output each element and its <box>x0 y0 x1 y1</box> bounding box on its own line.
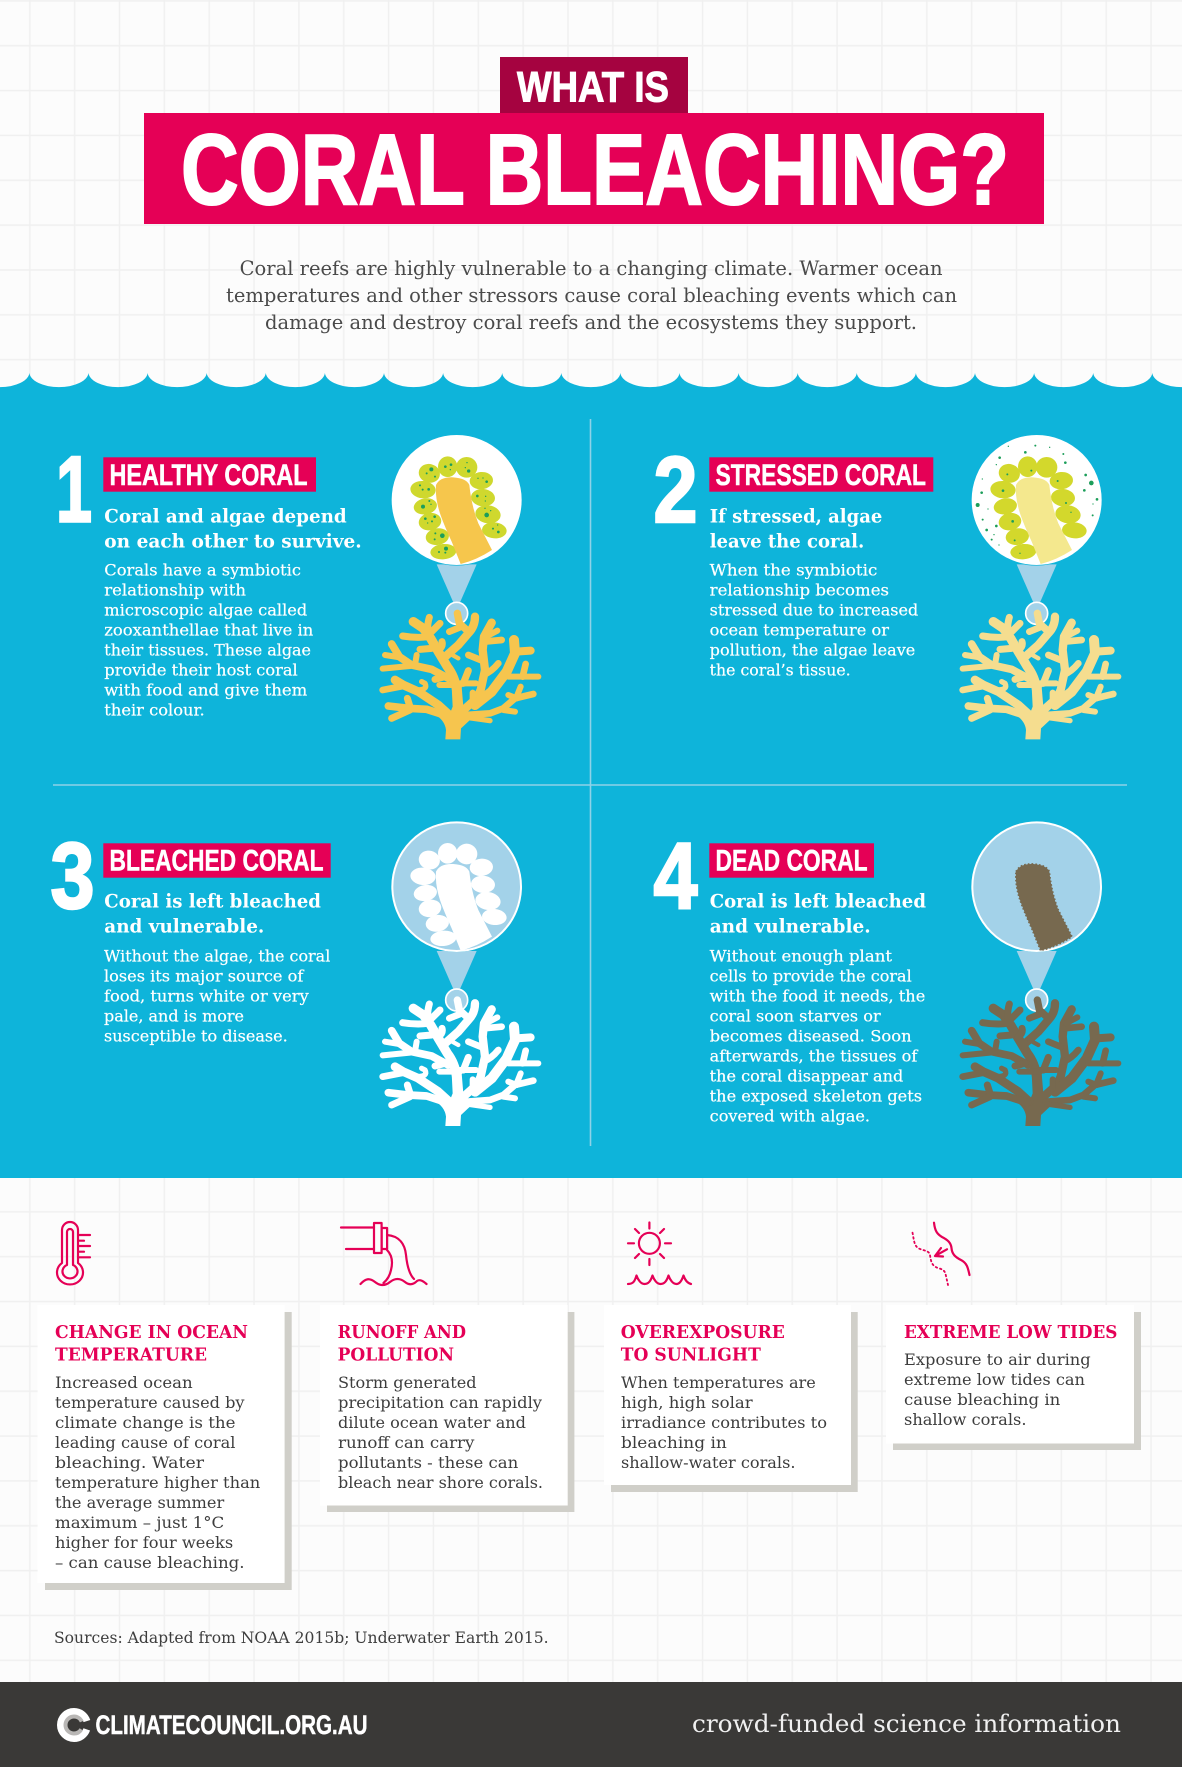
subheading <box>104 506 362 553</box>
label: healthy coral: HEALTHY CORAL <box>110 459 308 492</box>
body text: pollution, the algae leave <box>710 642 915 660</box>
card: overexposure to sunlight: bleaching in <box>621 1434 727 1452</box>
card: change in ocean temperature: higher for four weeks <box>55 1534 233 1552</box>
card: runoff and pollution: Storm generated <box>338 1374 477 1392</box>
number 3: 3 <box>50 823 94 928</box>
body text: their colour. <box>104 702 205 720</box>
subheading: Coral is left bleached <box>710 891 926 913</box>
body text: coral soon starves or <box>710 1007 881 1025</box>
body text: with the food it needs, the <box>710 987 925 1005</box>
card: change in ocean temperature: TEMPERATURE <box>55 1345 207 1366</box>
body text: the coral disappear and <box>710 1067 903 1085</box>
body text: relationship becomes <box>710 582 889 600</box>
card: runoff and pollution: POLLUTION <box>338 1345 454 1366</box>
subheading: and vulnerable. <box>104 916 264 938</box>
card: change in ocean temperature: the average summer <box>55 1494 225 1512</box>
logo mark <box>60 1712 88 1738</box>
body text: loses its major source of <box>104 967 305 985</box>
title <box>144 57 1044 226</box>
icon: thermometer <box>57 1222 90 1284</box>
card: change in ocean temperature: CHANGE IN OCEAN <box>55 1322 248 1343</box>
subheading: Coral and algae depend <box>104 506 347 528</box>
subheading <box>710 891 926 938</box>
card: change in ocean temperature: maximum – just 1°C <box>55 1514 224 1532</box>
intro text: temperatures and other stressors cause coral bleaching events which can <box>226 283 957 307</box>
body text: pale, and is more <box>104 1007 244 1025</box>
body text: cells to provide the coral <box>710 967 912 985</box>
subheading: If stressed, algae <box>710 506 882 528</box>
illustration: bleached coral <box>383 821 538 1126</box>
subheading: leave the coral. <box>710 531 864 553</box>
website: CLIMATECOUNCIL.ORG.AU <box>96 1710 368 1740</box>
body text: relationship with <box>104 582 246 600</box>
card: change in ocean temperature: temperature caused by <box>55 1394 245 1412</box>
card: runoff and pollution: RUNOFF AND <box>338 1322 466 1343</box>
body text: zooxanthellae that live in <box>104 622 313 640</box>
icon: tide line moving <box>912 1223 970 1285</box>
body text <box>104 947 330 1045</box>
panel 4: dead coral <box>654 821 1118 1126</box>
number 1: 1 <box>56 436 92 542</box>
illustration: stressed coral with algae leaving <box>963 435 1118 739</box>
card: change in ocean temperature: climate change is the <box>55 1414 236 1432</box>
label: stressed coral: STRESSED CORAL <box>716 459 926 492</box>
body text: with food and give them <box>104 682 308 700</box>
card: change in ocean temperature <box>38 1305 292 1590</box>
body text: the exposed skeleton gets <box>710 1087 922 1105</box>
ocean panel with scalloped top <box>0 373 1182 1178</box>
card: extreme low tides: extreme low tides can <box>904 1371 1085 1389</box>
card: runoff and pollution: dilute ocean water and <box>338 1414 526 1432</box>
card: overexposure to sunlight <box>604 1305 858 1492</box>
panel 2: stressed coral <box>654 435 1118 739</box>
label: dead coral: DEAD CORAL <box>716 845 868 878</box>
body text: provide their host coral <box>104 662 298 680</box>
illustration: dead coral <box>963 821 1118 1126</box>
tagline: crowd-funded science information <box>692 1710 1121 1738</box>
card: overexposure to sunlight: shallow-water corals. <box>621 1454 796 1472</box>
subheading: Coral is left bleached <box>104 891 321 913</box>
card: overexposure to sunlight: irradiance contributes to <box>621 1414 827 1432</box>
intro text: damage and destroy coral reefs and the ecosystems they support. <box>265 310 917 334</box>
body text: susceptible to disease. <box>104 1027 288 1045</box>
subheading: and vulnerable. <box>710 916 871 938</box>
card: overexposure to sunlight: When temperatures are <box>621 1374 816 1392</box>
body text: the coral’s tissue. <box>710 662 851 680</box>
icon: outflow pipe <box>341 1223 426 1285</box>
footer <box>0 1682 1182 1767</box>
subheading: on each other to survive. <box>104 531 362 553</box>
body text: When the symbiotic <box>710 562 877 580</box>
card: runoff and pollution: pollutants - these can <box>338 1454 518 1472</box>
title: WHAT IS <box>517 64 669 112</box>
body text: afterwards, the tissues of <box>710 1047 919 1065</box>
sources: Sources: Adapted from NOAA 2015b; Underwater Earth 2015. <box>54 1629 549 1647</box>
card: change in ocean temperature: leading cause of coral <box>55 1434 236 1452</box>
body text: their tissues. These algae <box>104 642 311 660</box>
intro text <box>226 256 957 334</box>
body text: Without enough plant <box>710 947 893 965</box>
card: change in ocean temperature: – can cause bleaching. <box>55 1554 244 1572</box>
body text <box>104 562 313 720</box>
subheading <box>710 506 882 553</box>
card: extreme low tides: cause bleaching in <box>904 1391 1060 1409</box>
body text: becomes diseased. Soon <box>710 1027 912 1045</box>
body text: Without the algae, the coral <box>104 947 330 965</box>
body text: Corals have a symbiotic <box>104 562 301 580</box>
card: extreme low tides: Exposure to air during <box>904 1351 1091 1369</box>
body text: covered with algae. <box>710 1107 870 1125</box>
body text: stressed due to increased <box>710 602 918 620</box>
body text: ocean temperature or <box>710 622 890 640</box>
number 4: 4 <box>654 823 698 928</box>
subheading <box>104 891 321 938</box>
panel 1: healthy coral <box>56 435 538 739</box>
card: overexposure to sunlight: high, high solar <box>621 1394 753 1412</box>
card: runoff and pollution: runoff can carry <box>338 1434 475 1452</box>
body text: food, turns white or very <box>104 987 309 1005</box>
label: bleached coral: BLEACHED CORAL <box>110 845 324 878</box>
panel 3: bleached coral <box>50 821 538 1126</box>
card: extreme low tides: EXTREME LOW TIDES <box>904 1322 1117 1343</box>
body text <box>710 562 918 680</box>
card: extreme low tides <box>886 1305 1141 1450</box>
body text <box>710 947 925 1125</box>
body text: microscopic algae called <box>104 602 307 620</box>
card: overexposure to sunlight: TO SUNLIGHT <box>621 1345 761 1366</box>
card: change in ocean temperature: temperature higher than <box>55 1474 260 1492</box>
card: change in ocean temperature: Increased ocean <box>55 1374 193 1392</box>
intro text: Coral reefs are highly vulnerable to a changing climate. Warmer ocean <box>240 256 943 280</box>
card: extreme low tides: shallow corals. <box>904 1411 1026 1429</box>
icon: sun over water <box>628 1222 691 1284</box>
card: runoff and pollution: bleach near shore corals. <box>338 1474 543 1492</box>
card: runoff and pollution <box>320 1305 574 1512</box>
illustration: healthy coral and algae <box>383 435 538 739</box>
card: runoff and pollution: precipitation can rapidly <box>338 1394 542 1412</box>
card: overexposure to sunlight: OVEREXPOSURE <box>621 1322 785 1343</box>
number 2: 2 <box>654 437 698 542</box>
card: change in ocean temperature: bleaching. Water <box>55 1454 205 1472</box>
